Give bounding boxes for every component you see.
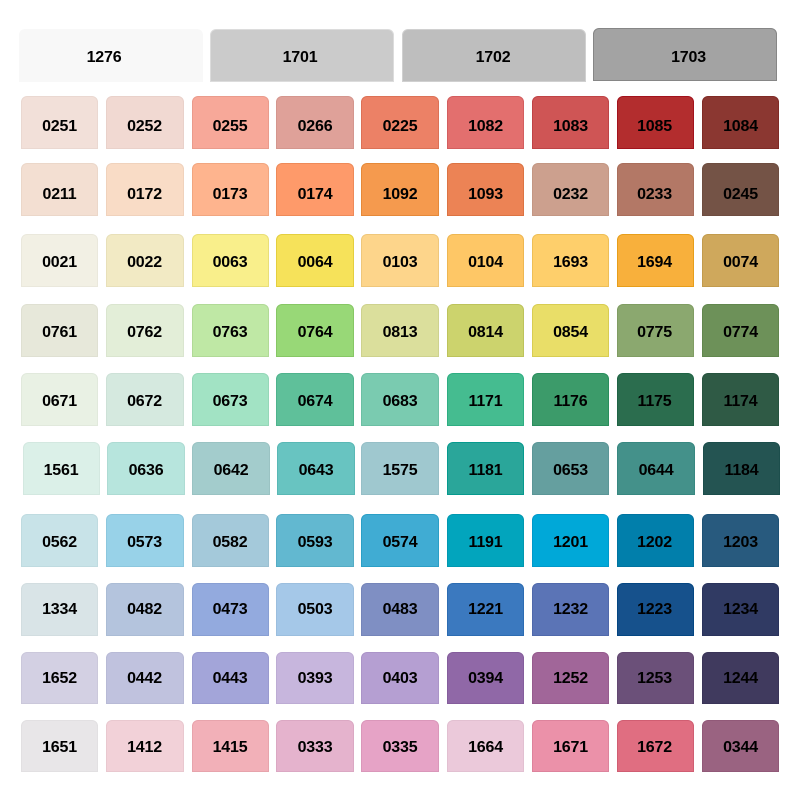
swatch 0593: [276, 514, 354, 567]
swatch 1201: 1201: [553, 534, 588, 551]
swatch 1701: [210, 29, 394, 82]
swatch 1334: [21, 583, 98, 636]
swatch 0671: [21, 373, 98, 426]
swatch 0672: [106, 373, 184, 426]
swatch 0683: 0683: [383, 393, 417, 410]
swatch 0672: 0672: [127, 393, 162, 410]
swatch 1252: 1252: [553, 670, 588, 687]
swatch 1202: [617, 514, 694, 567]
swatch 0644: 0644: [639, 462, 673, 479]
swatch 0642: 0642: [214, 462, 248, 479]
swatch 0813: 0813: [383, 324, 417, 341]
swatch 0775: 0775: [637, 324, 672, 341]
swatch 0653: 0653: [553, 462, 588, 479]
swatch 0225: 0225: [383, 118, 417, 135]
swatch 1083: [532, 96, 609, 149]
swatch 1412: [106, 720, 184, 772]
swatch 0225: [361, 96, 439, 149]
swatch 1561: [22, 442, 100, 494]
header row: greys: [87, 28, 777, 82]
swatch 1171: 1171: [469, 393, 502, 410]
swatch 0021: [21, 234, 98, 287]
swatch 0063: 0063: [213, 254, 247, 271]
swatch 0674: [276, 373, 354, 426]
swatch 0394: 0394: [468, 670, 503, 687]
swatch 0393: [276, 652, 354, 704]
swatch 0442: [106, 652, 184, 704]
swatch 0442: 0442: [127, 670, 162, 687]
swatch 1234: [702, 583, 779, 636]
swatch 1664: [447, 720, 524, 772]
swatch 1093: 1093: [468, 186, 503, 203]
swatch 0074: [702, 234, 779, 287]
swatch 0763: [192, 304, 268, 357]
swatch 0673: 0673: [213, 393, 247, 410]
swatch 0252: 0252: [127, 118, 162, 135]
swatch 1276: 1276: [87, 49, 121, 66]
swatch 0245: [702, 163, 779, 216]
swatch 0172: 0172: [127, 186, 162, 203]
swatch 0562: 0562: [42, 534, 77, 551]
swatch 1276: [19, 29, 203, 82]
swatch 0173: [192, 163, 268, 216]
swatch 0483: 0483: [383, 601, 417, 618]
swatch 1253: [617, 652, 694, 704]
swatch 1244: [702, 652, 779, 704]
swatch 1171: [447, 373, 524, 426]
swatch 0762: [106, 304, 184, 357]
swatch 1191: 1191: [469, 534, 502, 551]
swatch 0774: 0774: [723, 324, 758, 341]
swatch 0762: 0762: [127, 324, 162, 341]
swatch 0211: [21, 163, 98, 216]
swatch 0761: [21, 304, 98, 357]
swatch 1651: 1651: [42, 739, 77, 756]
swatch 0582: 0582: [213, 534, 247, 551]
swatch 1652: 1652: [42, 670, 77, 687]
swatch 0245: 0245: [723, 186, 758, 203]
swatch 0104: [447, 234, 524, 287]
swatch 0482: 0482: [127, 601, 162, 618]
swatch 0573: [106, 514, 184, 567]
swatch 1234: 1234: [723, 601, 758, 618]
swatch 0673: [192, 373, 268, 426]
swatch 0814: [447, 304, 524, 357]
swatch 1703: [593, 28, 777, 81]
swatch 0344: 0344: [723, 739, 758, 756]
swatch 1203: [702, 514, 779, 567]
swatch 1184: [703, 442, 780, 494]
swatch 0636: [107, 442, 185, 494]
swatch 1252: [532, 652, 609, 704]
swatch 0671: 0671: [42, 393, 77, 410]
swatch 1082: 1082: [468, 118, 503, 135]
swatch 0333: 0333: [298, 739, 332, 756]
swatch 1694: [617, 234, 694, 287]
swatch 0074: 0074: [723, 254, 758, 271]
swatch 0103: 0103: [383, 254, 417, 271]
swatch 0503: [276, 583, 354, 636]
swatch 0022: [106, 234, 184, 287]
swatch 0251: [21, 96, 98, 149]
swatch 0473: 0473: [213, 601, 247, 618]
swatch 0021: 0021: [42, 254, 77, 271]
swatch 1415: [192, 720, 268, 772]
swatch 1415: 1415: [213, 739, 247, 756]
swatch 1092: 1092: [383, 186, 417, 203]
swatch 1232: [532, 583, 609, 636]
swatch 0232: [532, 163, 609, 216]
swatch 0643: 0643: [299, 462, 333, 479]
swatch 0814: 0814: [468, 324, 503, 341]
swatch 1334: 1334: [42, 601, 77, 618]
swatch 1083: 1083: [553, 118, 588, 135]
swatch 0574: [361, 514, 439, 567]
swatch 0103: [361, 234, 439, 287]
swatch 1702: 1702: [476, 49, 510, 66]
swatch 1651: [21, 720, 98, 772]
swatch 0482: [106, 583, 184, 636]
swatch 0854: [532, 304, 609, 357]
swatch 0255: [192, 96, 268, 149]
swatch 0764: 0764: [298, 324, 332, 341]
swatch 0173: 0173: [213, 186, 247, 203]
swatch 0643: [277, 442, 355, 494]
swatch 0232: 0232: [553, 186, 588, 203]
swatch 0774: [702, 304, 779, 357]
swatch 1244: 1244: [723, 670, 758, 687]
swatch 0763: 0763: [213, 324, 247, 341]
swatch 0172: [106, 163, 184, 216]
swatch 1223: 1223: [637, 601, 672, 618]
swatch 1085: 1085: [637, 118, 672, 135]
swatch 0233: 0233: [637, 186, 672, 203]
swatch 0761: 0761: [42, 324, 77, 341]
swatch 0266: [276, 96, 354, 149]
swatch 0562: [21, 514, 98, 567]
swatch 1092: [361, 163, 439, 216]
swatch 0344: [702, 720, 779, 772]
swatch 0174: 0174: [298, 186, 332, 203]
swatch 1084: 1084: [723, 118, 758, 135]
swatch 0335: [361, 720, 439, 772]
swatch 1575: 1575: [383, 462, 417, 479]
swatch 1176: 1176: [554, 393, 587, 410]
swatch 0443: [192, 652, 268, 704]
swatch 1201: [532, 514, 609, 567]
swatch 1703: 1703: [671, 49, 706, 66]
swatch 1176: [532, 373, 609, 426]
swatch 0064: [276, 234, 354, 287]
swatch 0403: 0403: [383, 670, 417, 687]
swatch 1202: 1202: [637, 534, 672, 551]
swatch 0393: 0393: [298, 670, 332, 687]
swatch 1084: [702, 96, 779, 149]
swatch 1175: [617, 373, 694, 426]
swatch 0266: 0266: [298, 118, 332, 135]
swatch 0582: [192, 514, 268, 567]
swatch 0683: [361, 373, 439, 426]
swatch 0255: 0255: [213, 118, 247, 135]
swatch 1575: [361, 442, 439, 494]
swatch 0174: [276, 163, 354, 216]
swatch 1232: 1232: [553, 601, 588, 618]
swatch 1223: [617, 583, 694, 636]
swatch 0775: [617, 304, 694, 357]
swatch 1672: 1672: [637, 739, 672, 756]
swatch 1652: [21, 652, 98, 704]
swatch 0503: 0503: [298, 601, 332, 618]
swatch 1701: 1701: [283, 49, 317, 66]
swatch 1191: [447, 514, 524, 567]
swatch 1184: 1184: [725, 462, 758, 479]
swatch 0064: 0064: [298, 254, 332, 271]
swatch 1174: 1174: [724, 393, 757, 410]
swatch 0022: 0022: [127, 254, 162, 271]
swatch 0813: [361, 304, 439, 357]
swatch 0335: 0335: [383, 739, 417, 756]
swatch 1181: [447, 442, 524, 494]
swatch 0644: [617, 442, 695, 494]
swatch 0674: 0674: [298, 393, 332, 410]
swatch 1702: [402, 29, 586, 82]
swatch 0233: [617, 163, 694, 216]
swatch 0403: [361, 652, 439, 704]
swatch 1093: [447, 163, 524, 216]
swatch 0443: 0443: [213, 670, 247, 687]
swatch 0636: 0636: [129, 462, 163, 479]
swatch 0593: 0593: [298, 534, 332, 551]
swatch 1671: 1671: [553, 739, 588, 756]
swatch 1174: [702, 373, 779, 426]
swatch 0483: [361, 583, 439, 636]
swatch 0764: [276, 304, 354, 357]
swatch 0251: 0251: [42, 118, 77, 135]
swatch 1221: [447, 583, 524, 636]
swatch 1412: 1412: [127, 739, 162, 756]
swatch 0333: [276, 720, 354, 772]
swatch 0063: [192, 234, 268, 287]
swatch 1664: 1664: [468, 739, 503, 756]
swatch 0211: 0211: [43, 186, 76, 203]
swatch 1203: 1203: [723, 534, 758, 551]
swatch 1671: [532, 720, 609, 772]
swatch 1085: [617, 96, 694, 149]
swatch 1221: 1221: [468, 601, 503, 618]
swatch 0573: 0573: [127, 534, 162, 551]
swatch 0642: [192, 442, 270, 494]
swatch 0104: 0104: [468, 254, 503, 271]
swatch 1693: 1693: [553, 254, 588, 271]
swatch 1253: 1253: [637, 670, 672, 687]
swatch 1694: 1694: [637, 254, 672, 271]
swatch 1693: [532, 234, 609, 287]
swatch 0653: [532, 442, 609, 494]
swatch 1672: [617, 720, 694, 772]
swatch 1082: [447, 96, 524, 149]
swatch 0473: [192, 583, 268, 636]
swatch 0252: [106, 96, 184, 149]
swatch 1561: 1561: [44, 462, 78, 479]
swatch 0394: [447, 652, 524, 704]
swatch 1175: 1175: [638, 393, 671, 410]
swatch 0574: 0574: [383, 534, 417, 551]
swatch 0854: 0854: [553, 324, 588, 341]
swatch 1181: 1181: [469, 462, 502, 479]
